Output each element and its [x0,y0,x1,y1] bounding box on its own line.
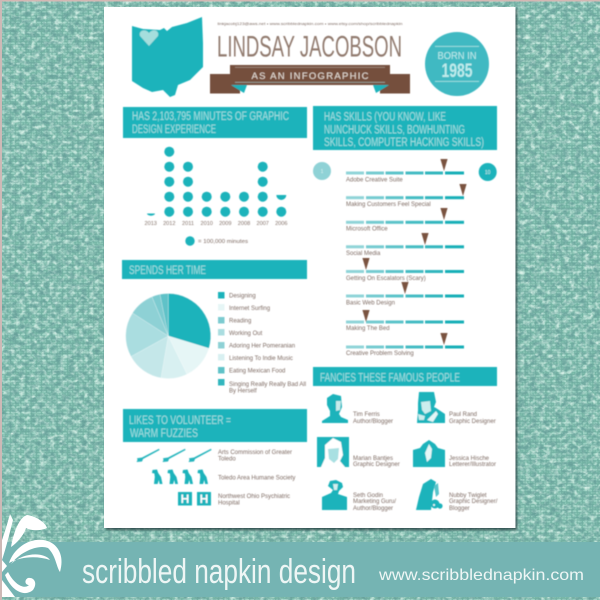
caption: Nubby Twiglet: Graphic Designer/ [449,499,498,505]
caption: Nubby Twiglet [449,493,498,512]
caption: Marian Bantjes: Marian Bantjes [353,456,393,462]
caption: Seth Godin [353,493,396,512]
heading: volunteer [123,409,307,442]
heading: famous people [313,367,497,386]
year labels: 2006 [275,221,288,227]
skill: Creative Problem Solving [346,333,464,357]
skill: Social Media: Social Media [346,251,381,257]
portrait: Marian Bantjes [317,437,349,467]
year labels [144,221,288,227]
pie legend: Reading [229,318,251,324]
pie legend: Singing Really Really Bad All [229,382,306,388]
caption: Seth Godin: Seth Godin [353,493,383,499]
skill: Microsoft Office [346,208,464,232]
skill: Basic Web Design [346,282,464,306]
heading: minutes of graphic design: DESIGN EXPERIENCE [132,124,216,136]
year labels: 2007 [256,221,269,227]
year labels: 2009 [219,221,232,227]
heading: famous people: FANCIES THESE FAMOUS PEOPLE [320,372,460,384]
volunteer text: hospital: Hospital [218,500,240,506]
volunteer text: hospital: Northwest Ohio Psychiatric [218,494,290,500]
scale start marker: 1 [321,169,324,175]
skill: Basic Web Design: Basic Web Design [346,300,395,306]
caption: Seth Godin: Marketing Guru/ [353,499,396,505]
skill: Getting On Escalators [346,258,464,282]
icons: hospitals [178,492,211,506]
skill: Adobe Creative Suite [346,159,464,184]
caption: Jessica Hische: Letterer/Illustrator [449,462,496,468]
scale start marker [313,162,331,180]
pie legend: Listening To Indie Music [229,356,293,362]
caption: Marian Bantjes: Graphic Designer [353,462,400,468]
skill bars [346,159,467,357]
volunteer text: arts commission: Toledo [218,456,236,462]
caption: Jessica Hische: Jessica Hische [449,456,490,462]
year labels: 2010 [200,221,213,227]
chart legend [185,236,248,246]
heading: skills: SKILLS, COMPUTER HACKING SKILLS) [324,137,484,149]
ribbon: as an infographic [210,65,410,94]
heading: minutes of graphic design: HAS 2,103,795 MINUTES OF GRAPHIC [132,111,289,123]
volunteer text: hospital [218,494,290,506]
heading: skills [313,106,497,150]
icons: dogs [152,470,208,484]
heading: volunteer: LIKES TO VOLUNTEER = [129,415,231,427]
volunteer text: arts commission: Arts Commission of Greater [218,450,292,456]
ribbon: as an infographic: AS AN INFOGRAPHIC [252,71,369,82]
scale end marker [479,163,497,181]
skill: Making The Bed [346,310,464,332]
heading: spends her time: SPENDS HER TIME [129,265,206,277]
badge: born in 1985 [425,32,489,96]
portrait: Tim Ferris [322,394,348,423]
paper sheet [104,7,517,530]
heading: spends her time [122,260,307,279]
title: name: LINDSAY JACOBSON [217,30,402,64]
contact line: linkjacobj123@aws.net • www.scribblednapkin.com • www.etsy.com/shop/scribblednapkin [218,22,402,26]
portrait: Paul Rand [417,392,445,423]
pie chart: time [126,293,211,379]
year labels: 2012 [163,221,176,227]
caption: Paul Rand [449,412,496,425]
icons: paint brushes [136,449,212,462]
caption: Tim Ferris: Tim Ferris [353,412,380,418]
pie legend: Designing [229,294,256,300]
footer url: www.scribblednapkin.com [378,567,584,584]
badge: born in 1985: BORN IN [438,51,476,62]
year labels: 2013 [144,221,157,227]
skill: Making Customers Feel Special: Making Customers Feel Special [346,202,431,208]
caption: Tim Ferris [353,412,393,425]
caption: Nubby Twiglet: Blogger [449,506,470,512]
pie legend [218,292,306,394]
footer brand name: scribbled napkin design [82,553,356,591]
chart legend: = 100,000 minutes [198,239,248,245]
skill: Microsoft Office: Microsoft Office [346,226,388,232]
portrait: Nubby Twiglet [416,479,443,510]
skill: Making Customers Feel Special [346,184,467,208]
volunteer text: humane society: Toledo Area Humane Society [218,476,295,482]
caption: Jessica Hische [449,456,496,468]
footer band [2,542,600,597]
skill: Making The Bed: Making The Bed [346,326,390,332]
pie legend: Eating Mexican Food [229,368,285,374]
skill: Adobe Creative Suite: Adobe Creative Suite [346,178,403,184]
caption: Marian Bantjes [353,456,400,468]
skill: Getting On Escalators: Getting On Escalators (Scary) [346,276,426,282]
heading: skills: HAS SKILLS (YOU KNOW, LIKE [324,112,446,124]
volunteer text: arts commission [218,450,292,462]
icons: hospitals: H [200,492,208,506]
caption: Paul Rand: Paul Rand [449,412,477,418]
icon: Ohio map with heart [132,17,203,97]
heading: minutes of graphic design [123,107,307,138]
portrait: Jessica Hische [413,440,445,467]
caption: Tim Ferris: Author/Blogger [353,419,393,425]
pie legend: Adoring Her Pomeranian [229,344,295,350]
caption: Paul Rand: Graphic Designer [449,419,496,425]
skill: Social Media [346,233,464,257]
dot chart: minutes per year [147,147,286,217]
pie legend: Internet Surfing [229,306,270,312]
icons: hospitals: H [181,492,189,506]
scale end marker: 10 [485,170,491,176]
year labels: 2011 [182,221,194,227]
caption: Seth Godin: Author/Blogger [353,506,393,512]
icon: white flourish [2,514,62,597]
pie legend: By Herself [229,388,257,394]
pie legend: Working Out [229,331,263,337]
heading: volunteer: WARM FUZZIES [130,428,198,440]
heading: skills: NUNCHUCK SKILLS, BOWHUNTING [324,124,465,136]
skill: Creative Problem Solving: Creative Problem Solving [346,351,414,357]
year labels: 2008 [238,221,250,227]
caption: Nubby Twiglet: Nubby Twiglet [449,493,487,499]
portrait: Seth Godin [322,480,347,510]
badge: born in 1985: 1985 [442,61,473,82]
